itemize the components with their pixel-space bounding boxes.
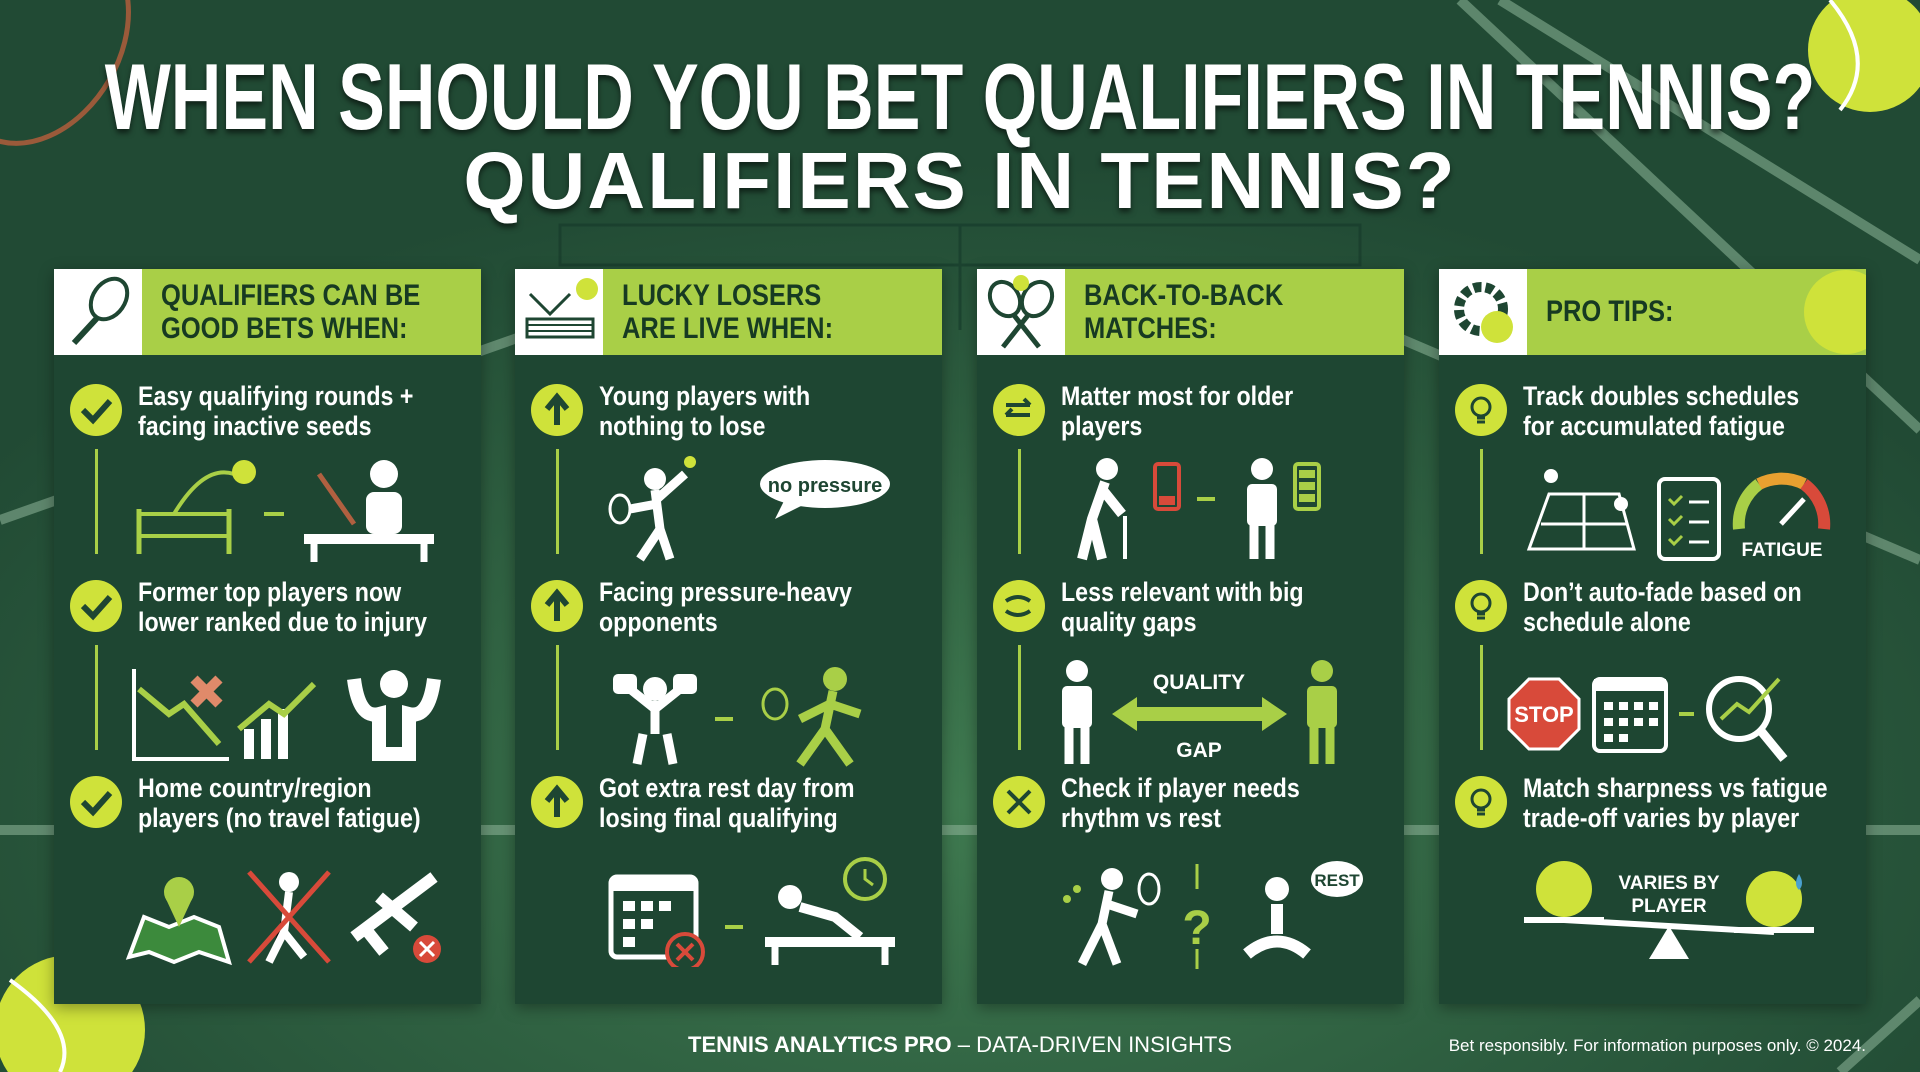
icon row: no pressure player: no pressure bbox=[768, 475, 882, 497]
panel: lucky losers: Facing pressure-heavy bbox=[599, 577, 852, 607]
panel: pro tips: schedule alone bbox=[1523, 607, 1691, 637]
header: pro tips bbox=[1439, 269, 1866, 355]
item 2 bbox=[531, 577, 852, 637]
header: qualifiers: QUALIFIERS CAN BE bbox=[161, 279, 420, 312]
panel: lucky losers: opponents bbox=[599, 607, 718, 637]
item 3 bbox=[70, 773, 421, 833]
panel: qualifiers can be good bets: Home country/region bbox=[138, 773, 372, 803]
panel: back-to-back matches: Matter most for older bbox=[1061, 381, 1293, 411]
panel: back-to-back matches: players bbox=[1061, 411, 1142, 441]
icon row: rhythm vs rest bbox=[1063, 861, 1363, 969]
title: WHEN SHOULD YOU BET QUALIFIERS IN TENNIS? bbox=[105, 44, 1815, 149]
icon row: balance scale bbox=[1524, 861, 1814, 959]
icon row: calendar to rest bbox=[608, 857, 895, 967]
icon row: quality gap: GAP bbox=[1176, 739, 1222, 762]
icon row: pressure to player bbox=[613, 667, 862, 767]
item 1 bbox=[531, 381, 810, 441]
panel: lucky losers: nothing to lose bbox=[599, 411, 765, 441]
header: back-to-back: BACK-TO-BACK bbox=[1084, 279, 1283, 312]
item 1 bbox=[70, 381, 413, 441]
icon row: balance scale: VARIES BY bbox=[1618, 873, 1720, 894]
panel: qualifiers can be good bets: players (no travel fatigue) bbox=[138, 803, 421, 833]
icon row: rhythm vs rest: ? bbox=[1182, 902, 1212, 955]
item 2 bbox=[1455, 577, 1802, 637]
icon row: net to bench bbox=[136, 460, 434, 562]
panel: pro tips: trade-off varies by player bbox=[1523, 803, 1799, 833]
header: lucky losers: ARE LIVE WHEN: bbox=[622, 312, 833, 345]
header: back-to-back bbox=[977, 269, 1404, 355]
panel: pro tips: Track doubles schedules bbox=[1523, 381, 1799, 411]
panel: back-to-back matches bbox=[977, 269, 1404, 1004]
icon row: decline, growth, strength bbox=[132, 669, 441, 761]
header: lucky losers: LUCKY LOSERS bbox=[622, 279, 821, 312]
icon row: no pressure player bbox=[608, 456, 890, 562]
panel: back-to-back matches: rhythm vs rest bbox=[1061, 803, 1221, 833]
item 3 bbox=[993, 773, 1300, 833]
header: lucky losers bbox=[515, 269, 942, 355]
panel: qualifiers can be good bets: lower ranked due to injury bbox=[138, 607, 427, 637]
panel: lucky losers: Young players with bbox=[599, 381, 810, 411]
item 3 bbox=[531, 773, 855, 833]
icon row: old player to young player bbox=[1077, 458, 1321, 560]
item 2 bbox=[70, 577, 427, 637]
panel: lucky losers: Got extra rest day from bbox=[599, 773, 855, 803]
item 3 bbox=[1455, 773, 1828, 833]
header: qualifiers: GOOD BETS WHEN: bbox=[161, 312, 408, 345]
panel: back-to-back matches: Check if player needs bbox=[1061, 773, 1300, 803]
panel: pro tips: Don’t auto-fade based on bbox=[1523, 577, 1802, 607]
panel: pro tips: for accumulated fatigue bbox=[1523, 411, 1785, 441]
icon row: stop, calendar, analysis: STOP bbox=[1514, 702, 1574, 727]
icon row: doubles court, checklist, fatigue gauge bbox=[1526, 469, 1830, 561]
footer: disclaimer: Bet responsibly. For information purposes only. © 2024. bbox=[1449, 1036, 1866, 1055]
panel: qualifiers can be good bets: Easy qualifying rounds + bbox=[138, 381, 413, 411]
panel: back-to-back matches: quality gaps bbox=[1061, 607, 1196, 637]
panel: qualifiers can be good bets: facing inactive seeds bbox=[138, 411, 372, 441]
item 1 bbox=[993, 381, 1293, 441]
panel: pro tips bbox=[1439, 269, 1866, 1004]
footer: brand: TENNIS ANALYTICS PRO – DATA-DRIVEN INSIGHTS bbox=[688, 1032, 1232, 1057]
panel: qualifiers can be good bets bbox=[54, 269, 481, 1004]
icon row: rhythm vs rest: REST bbox=[1314, 871, 1360, 890]
icon row: stop, calendar, analysis bbox=[1508, 676, 1788, 762]
icon row: balance scale: PLAYER bbox=[1631, 896, 1707, 917]
panel: lucky losers bbox=[515, 269, 942, 1004]
panel: lucky losers: losing final qualifying bbox=[599, 803, 838, 833]
icon row: map, no travel, plane bbox=[126, 870, 441, 966]
subtitle: QUALIFIERS IN TENNIS? bbox=[463, 136, 1457, 225]
panel: back-to-back matches: Less relevant with big bbox=[1061, 577, 1304, 607]
item 1 bbox=[1455, 381, 1799, 441]
icon row: doubles court, checklist, fatigue gauge: FATIGUE bbox=[1742, 540, 1822, 561]
header: back-to-back: MATCHES: bbox=[1084, 312, 1217, 345]
icon row: quality gap: QUALITY bbox=[1153, 671, 1245, 694]
header: qualifiers bbox=[54, 269, 481, 355]
header: pro tips: PRO TIPS: bbox=[1546, 295, 1674, 328]
panel: pro tips: Match sharpness vs fatigue bbox=[1523, 773, 1828, 803]
icon row: quality gap bbox=[1062, 660, 1337, 764]
panel: qualifiers can be good bets: Former top players now bbox=[138, 577, 401, 607]
item 2 bbox=[993, 577, 1304, 637]
